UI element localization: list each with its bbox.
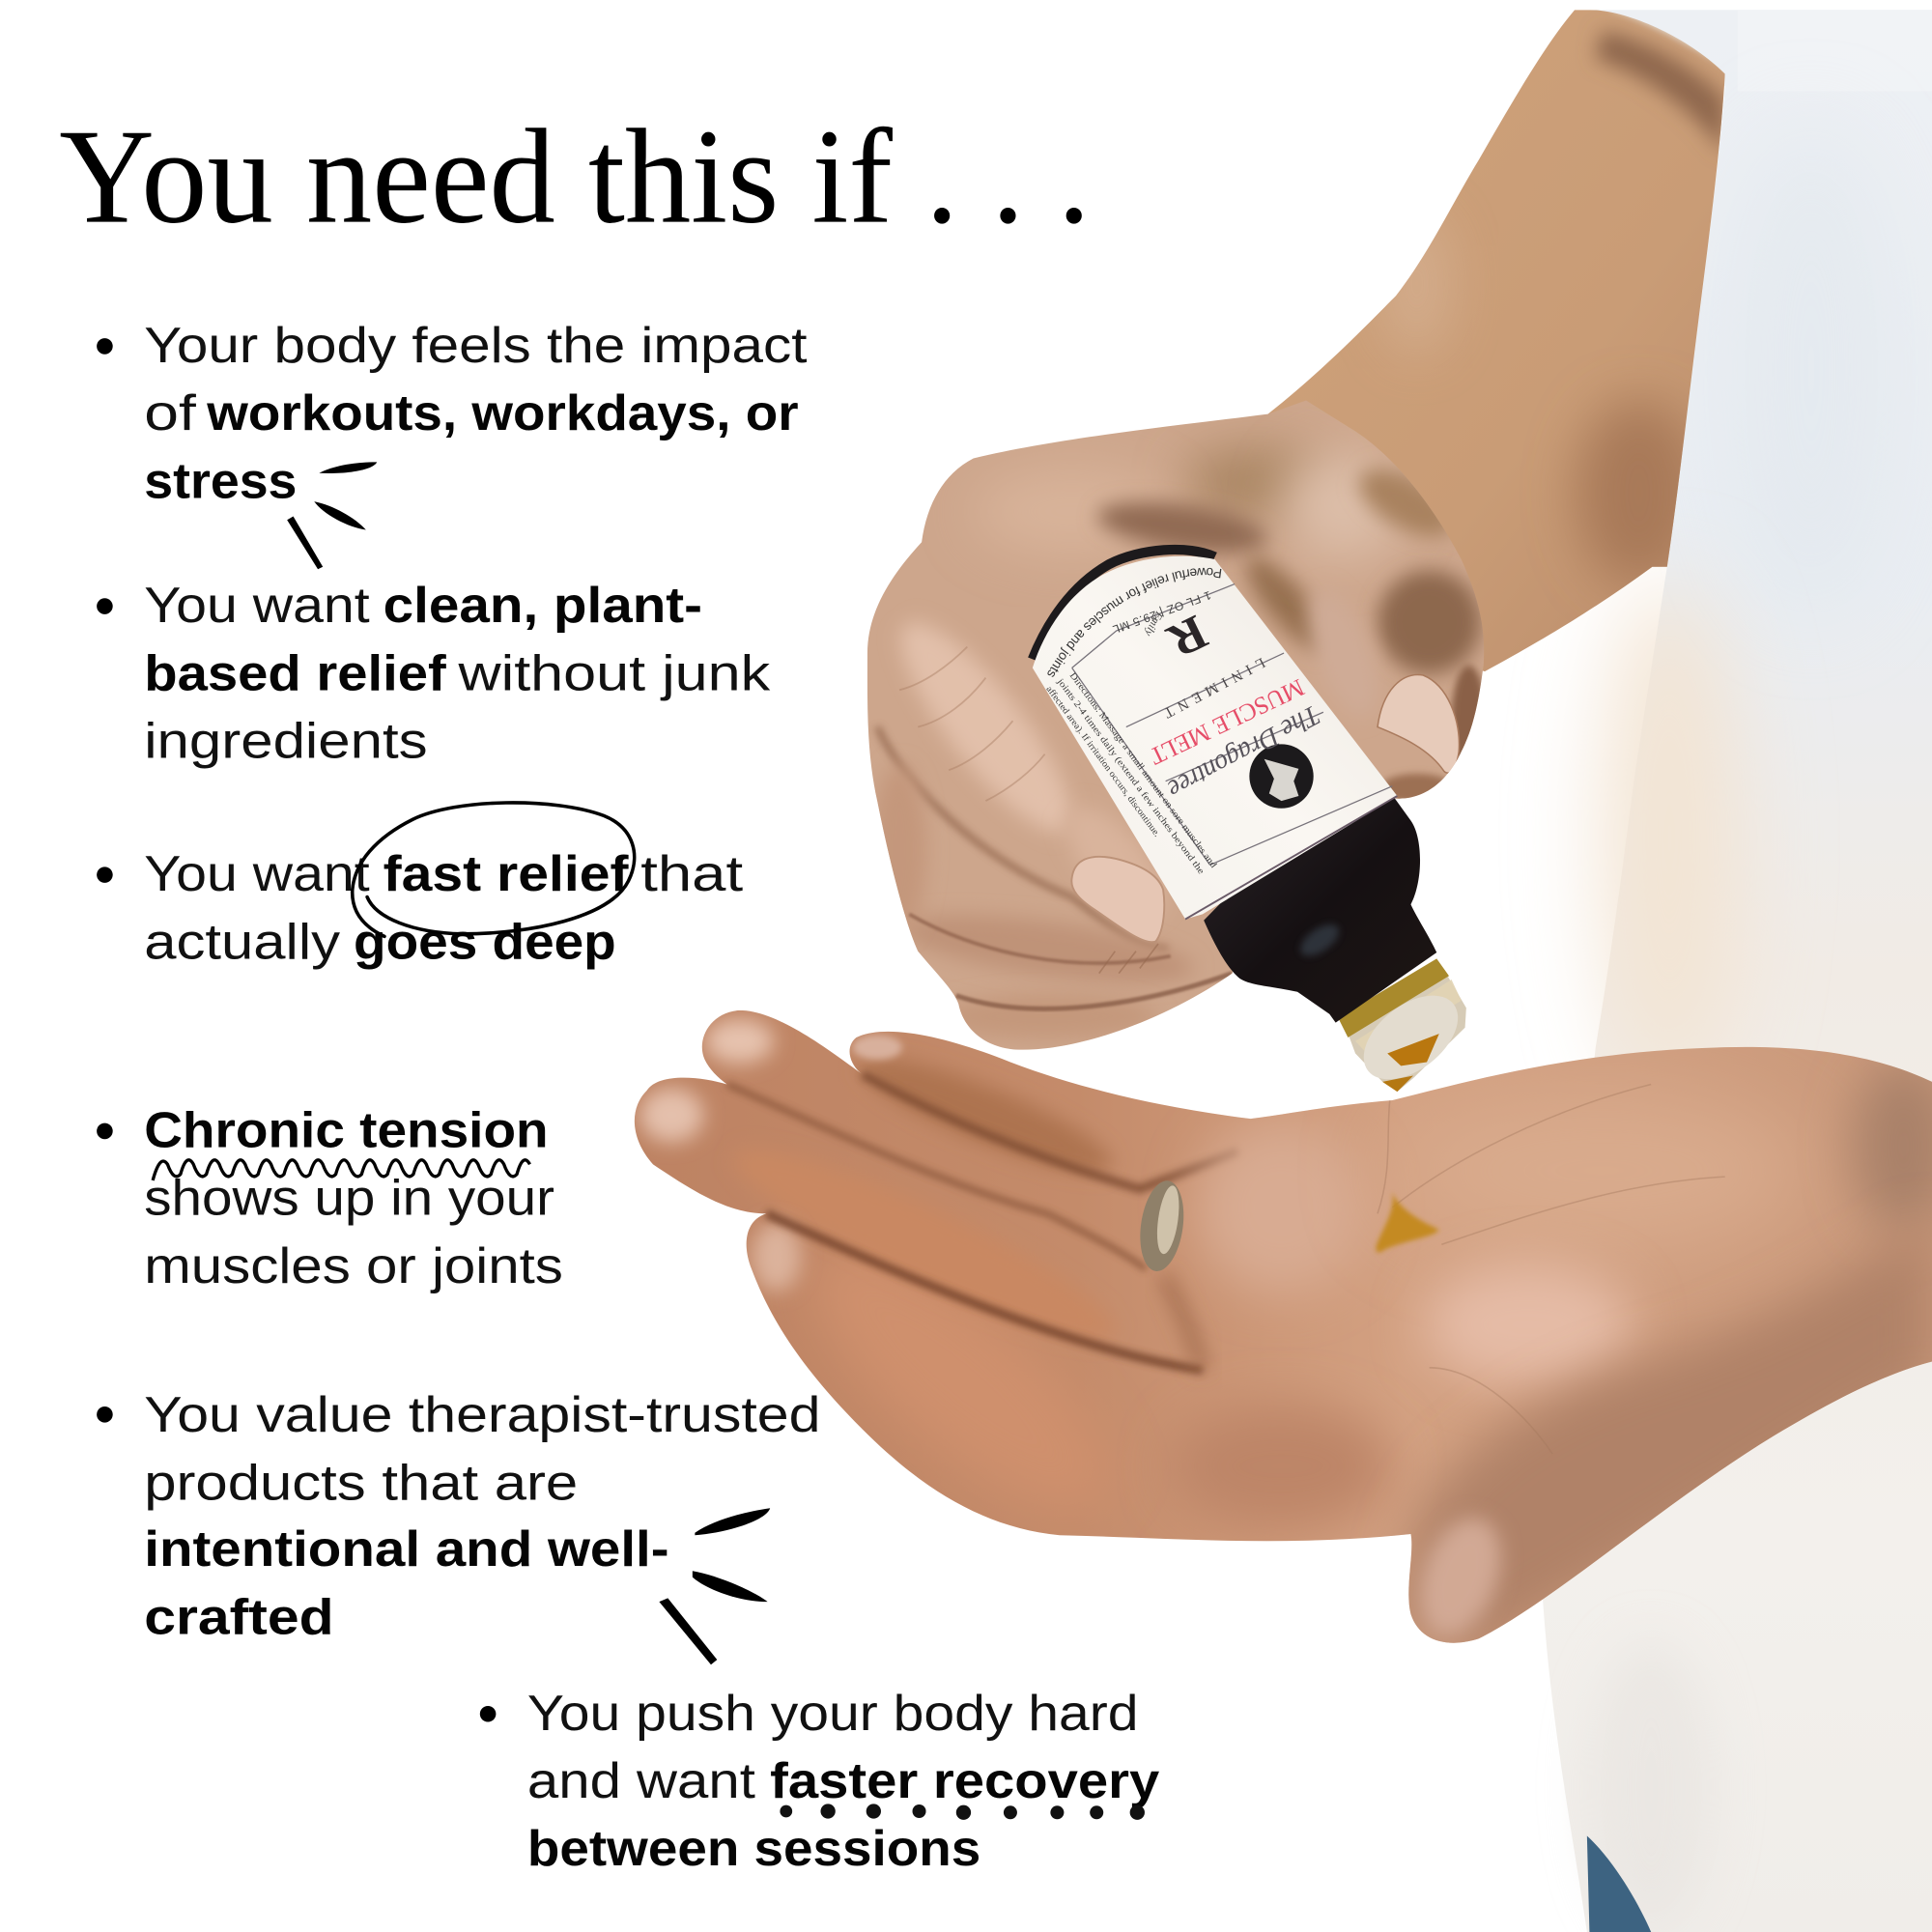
bullet 6: and want bbox=[527, 1753, 755, 1809]
bullet 6: You push your body hard bbox=[527, 1686, 1139, 1742]
bullet 2: clean, plant- bbox=[384, 578, 702, 634]
jeans bbox=[1587, 1836, 1651, 1932]
black shoulder bbox=[1204, 799, 1436, 1023]
label directions: Directions: Massage a small amount on sore muscles and bbox=[1067, 670, 1219, 870]
oil puddle bbox=[1376, 1193, 1439, 1252]
label directions: affected area). If irritation occurs, discontinue. bbox=[1043, 684, 1162, 839]
bullet 6: between sessions bbox=[527, 1821, 980, 1877]
label initial: R bbox=[1158, 604, 1215, 668]
label script: Emily bbox=[1142, 609, 1165, 639]
accent: dotted underline bbox=[780, 1804, 1145, 1820]
label: brand name: The Dragontree bbox=[1162, 699, 1324, 805]
bullet 3: fast relief bbox=[384, 846, 629, 902]
bullet 3: that bbox=[640, 846, 744, 902]
upper hand with thumb and fingers bbox=[850, 394, 1516, 1060]
bullet 1: stress bbox=[144, 453, 297, 509]
label directions bbox=[1043, 670, 1219, 876]
shirt bbox=[1540, 10, 1932, 1932]
bullet 2: based relief bbox=[144, 645, 446, 701]
index finger shading bbox=[896, 618, 1072, 835]
knuckle shading bbox=[1184, 448, 1332, 518]
label directions: joints 2-4 times daily (extend a few inches beyond the bbox=[1054, 676, 1207, 876]
label: Powerful relief for muscles and joints bbox=[1047, 568, 1221, 677]
title: You need this if . . . bbox=[59, 102, 1091, 252]
bullet 3 bbox=[97, 846, 744, 970]
accent: hand-drawn circle bbox=[353, 803, 635, 936]
bullet 2: ingredients bbox=[144, 713, 428, 769]
bullet 1 bbox=[97, 318, 808, 509]
bullet 1: of bbox=[144, 385, 196, 441]
finger separations bbox=[863, 1074, 1238, 1189]
bottle bbox=[1028, 545, 1466, 1092]
accent: squiggle underline bbox=[153, 1160, 529, 1180]
label tagline bbox=[1037, 568, 1222, 693]
bullet 2: without junk bbox=[457, 645, 771, 701]
bullet 2: You want bbox=[144, 578, 370, 634]
bullet 3: goes deep bbox=[354, 914, 616, 970]
bullet 5: intentional and well- bbox=[144, 1521, 669, 1577]
bullet 2 bbox=[97, 578, 771, 769]
photo: person pouring liniment into palm bbox=[578, 10, 1932, 1932]
bullet 3: You want bbox=[144, 846, 370, 902]
fingertip highlights bbox=[705, 1019, 774, 1064]
bullet 1: workouts, workdays, or bbox=[206, 385, 799, 441]
label size: 1 FL OZ | 29.5 ML bbox=[1111, 588, 1213, 637]
accent: stress burst bbox=[287, 462, 377, 569]
bullet 4: Chronic tension bbox=[144, 1102, 549, 1158]
bullet 5 bbox=[97, 1387, 820, 1645]
bullet 1: Your body feels the impact bbox=[144, 318, 808, 374]
label: liniment: LINIMENT bbox=[1160, 654, 1267, 722]
wedding ring bbox=[1140, 1180, 1184, 1271]
lower hand bbox=[616, 998, 1932, 1663]
bullet 5: crafted bbox=[144, 1589, 334, 1645]
palm creases bbox=[1378, 1084, 1725, 1454]
label emblem bbox=[1249, 744, 1314, 809]
fingernail: thumb bbox=[1378, 674, 1460, 773]
fingernail: index bbox=[1071, 857, 1164, 942]
bullet 4 bbox=[97, 1103, 563, 1294]
bullet 6 bbox=[480, 1686, 1159, 1877]
lower fingers bbox=[907, 912, 1189, 985]
bullet 5: You value therapist-trusted bbox=[144, 1387, 820, 1443]
label bbox=[1032, 556, 1398, 920]
lower thumb bbox=[1392, 1220, 1932, 1658]
bullet 4: shows up in your bbox=[144, 1171, 554, 1227]
bullet 5: products that are bbox=[144, 1455, 578, 1511]
forearm bbox=[1267, 10, 1725, 671]
finger shading bbox=[823, 1263, 1084, 1492]
label rules bbox=[1072, 584, 1392, 865]
glass dropper neck bbox=[1338, 958, 1473, 1096]
accent: well-crafted burst bbox=[659, 1508, 770, 1664]
cap rim bbox=[1033, 550, 1215, 659]
bullet 3: actually bbox=[144, 914, 341, 970]
bullet 6: faster recovery bbox=[770, 1753, 1159, 1809]
bullet 4: muscles or joints bbox=[144, 1238, 563, 1294]
palm shading bbox=[1195, 1122, 1368, 1293]
label: muscle melt: MUSCLE MELT bbox=[1145, 673, 1309, 771]
